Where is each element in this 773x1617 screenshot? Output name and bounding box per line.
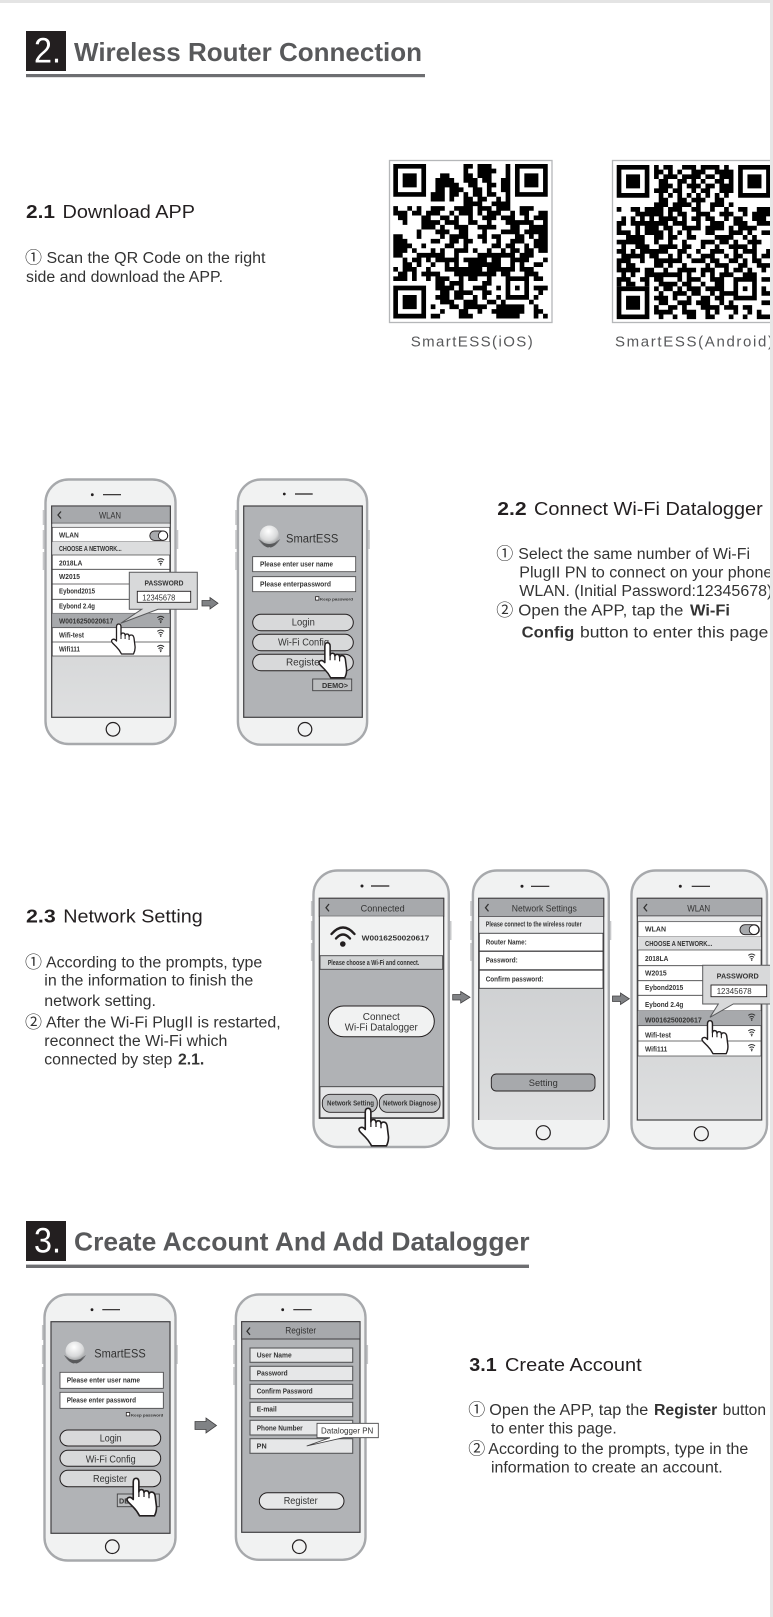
callout: Datalogger PN: Datalogger PN bbox=[321, 1426, 373, 1436]
phone: Connected screen: Network Setting bbox=[327, 1101, 374, 1108]
phone: Register form: User Name bbox=[257, 1353, 292, 1360]
phone: SmartESS login with Wi-Fi Config tap: Register bbox=[286, 658, 324, 668]
callout: password: PASSWORD bbox=[144, 580, 184, 587]
phone: SmartESS login with Register tap: Please enter user name bbox=[67, 1378, 140, 1385]
text block: 2.3 Network Setting: ① bbox=[25, 948, 42, 973]
phone: SmartESS login with Wi-Fi Config tap: Please enter user name bbox=[260, 562, 333, 569]
text block: 3.1 Create Account: 3.1 bbox=[469, 1354, 497, 1375]
text block: 3.1 Create Account: Open the APP, tap the bbox=[489, 1402, 648, 1419]
phone: Network Settings screen: Please connect to the wireless router bbox=[486, 922, 582, 929]
phone: WLAN list with password popup (second): 2018LA bbox=[645, 956, 668, 963]
phone: WLAN list with password popup: Eybond2015 bbox=[59, 589, 95, 596]
heading: section 2: 2. bbox=[34, 32, 61, 70]
phone: WLAN list with password popup: WLAN bbox=[59, 533, 79, 540]
text block: 2.2 Connect Wi-Fi Datalogger: Open the APP, tap the bbox=[518, 603, 683, 620]
phone: WLAN list with password popup: CHOOSE A NETWORK... bbox=[59, 546, 122, 553]
text block: 2.2 Connect Wi-Fi Datalogger: PlugII PN to connect on your phone bbox=[519, 565, 772, 582]
phone: Register form: Confirm Password bbox=[257, 1389, 313, 1396]
text block: 2.1 Download APP: Scan the QR Code on the right bbox=[46, 250, 266, 267]
phone: Connected screen: Wi-Fi Datalogger bbox=[345, 1022, 418, 1034]
arrow bbox=[195, 1418, 216, 1433]
phone: WLAN list with password popup: W2015 bbox=[59, 574, 80, 581]
phone: SmartESS login with Register tap: Please enter password bbox=[67, 1398, 136, 1405]
phone: Connected screen: Network Diagnose bbox=[383, 1101, 437, 1108]
phone: Network Settings screen bbox=[471, 870, 610, 1148]
phone: Register form: Password bbox=[257, 1371, 288, 1378]
text block: 2.3 Network Setting: According to the prompts, type bbox=[46, 954, 262, 971]
phone: Register form: Phone Number bbox=[257, 1426, 303, 1433]
heading: section 2 bbox=[26, 31, 425, 77]
text block: 2.3 Network Setting: ② bbox=[25, 1008, 42, 1033]
text block: 2.2 Connect Wi-Fi Datalogger: ② bbox=[496, 596, 513, 621]
QR code: SmartESS iOS: SmartESS(iOS) bbox=[411, 334, 533, 351]
phone: SmartESS login with Register tap: Login bbox=[100, 1433, 122, 1444]
heading: section 2: Wireless Router Connection bbox=[74, 37, 422, 67]
icon: hand pointer bbox=[319, 643, 347, 678]
phone: Network Settings screen: Password: bbox=[486, 958, 518, 965]
text block: 2.2 Connect Wi-Fi Datalogger: Select the same number of Wi-Fi bbox=[518, 546, 750, 563]
phone: Connected screen: Connect bbox=[363, 1012, 400, 1023]
phone: Network Settings screen: Router Name: bbox=[486, 940, 527, 947]
icon: hand pointer bbox=[127, 1478, 156, 1516]
arrow bbox=[202, 598, 218, 609]
phone: Register form: Register bbox=[285, 1325, 316, 1335]
callout: password bbox=[121, 572, 197, 623]
phone: WLAN list with password popup (second) bbox=[632, 870, 773, 1148]
icon: hand pointer bbox=[112, 624, 135, 654]
text block: 3.1 Create Account: to enter this page. bbox=[491, 1421, 617, 1438]
phone: SmartESS login with Register tap bbox=[43, 1294, 177, 1560]
heading: section 3 bbox=[26, 1221, 530, 1268]
text block: 2.3 Network Setting: reconnect the Wi-Fi which bbox=[44, 1033, 227, 1050]
text block: 3.1 Create Account: Create Account bbox=[505, 1354, 642, 1375]
text block: 3.1 Create Account: Register bbox=[654, 1402, 717, 1419]
phone: WLAN list with password popup: 2018LA bbox=[59, 561, 82, 568]
text block: 2.3 Network Setting: 2.3 bbox=[26, 905, 56, 926]
QR code: SmartESS Android: SmartESS(Android) bbox=[615, 334, 773, 351]
phone: Register form: E-mail bbox=[257, 1407, 277, 1414]
phone: SmartESS login with Wi-Fi Config tap: DEMO> bbox=[322, 683, 348, 690]
phone: SmartESS login with Register tap: Wi-Fi Config bbox=[86, 1454, 136, 1465]
text block: 2.2 Connect Wi-Fi Datalogger: WLAN. (Initial Password:12345678) bbox=[519, 583, 772, 600]
phone: Connected screen bbox=[312, 870, 451, 1147]
callout: password: 12345678 bbox=[717, 986, 752, 996]
phone: Connected screen: Please choose a Wi-Fi and connect. bbox=[328, 960, 419, 967]
phone: Network Settings screen: Setting bbox=[529, 1078, 558, 1088]
heading: section 3: Create Account And Add Datalogger bbox=[74, 1227, 530, 1257]
phone: WLAN list with password popup (second): Eybond 2.4g bbox=[645, 1002, 683, 1009]
phone: Connected screen: W0016250020617 bbox=[362, 936, 429, 943]
text block: 2.2 Connect Wi-Fi Datalogger: ① bbox=[496, 540, 513, 564]
phone: WLAN list with password popup (second): Eybond2015 bbox=[645, 985, 683, 992]
icon: hand pointer bbox=[359, 1108, 388, 1146]
phone: Network Settings screen: Network Settings bbox=[512, 904, 577, 914]
phone: Connected screen: Connected bbox=[361, 904, 405, 914]
QR code: SmartESS iOS bbox=[390, 160, 552, 351]
QR code: SmartESS Android bbox=[612, 160, 773, 351]
phone: WLAN list with password popup (second): Wifi-test bbox=[645, 1033, 672, 1040]
phone: SmartESS login with Register tap: DEMO> bbox=[119, 1498, 145, 1506]
phone: WLAN list with password popup (second): CHOOSE A NETWORK... bbox=[645, 941, 712, 948]
text block: 2.1 Download APP bbox=[25, 201, 266, 286]
phone: WLAN list with password popup (second): WLAN bbox=[645, 927, 666, 934]
text block: 3.1 Create Account: button bbox=[723, 1402, 766, 1419]
text block: 3.1 Create Account: information to create an account. bbox=[491, 1460, 723, 1477]
phone: SmartESS login with Wi-Fi Config tap: Keep password bbox=[320, 596, 354, 602]
phone: SmartESS login with Wi-Fi Config tap: Login bbox=[292, 618, 315, 628]
text block: 2.2 Connect Wi-Fi Datalogger: Wi-Fi bbox=[690, 603, 730, 620]
text block: 2.3 Network Setting bbox=[25, 905, 281, 1068]
phone: WLAN list with password popup (second): Wifi111 bbox=[645, 1047, 667, 1054]
text block: 2.3 Network Setting: Network Setting bbox=[63, 905, 203, 926]
callout: Datalogger PN bbox=[307, 1423, 378, 1446]
text block: 2.2 Connect Wi-Fi Datalogger: button to enter this page bbox=[580, 625, 768, 642]
icon: Wi-Fi bbox=[332, 928, 354, 946]
text block: 2.3 Network Setting: in the information to finish the bbox=[44, 973, 253, 990]
phone: WLAN list with password popup: Wifi111 bbox=[59, 647, 80, 654]
callout: password bbox=[703, 965, 773, 1017]
phone: SmartESS login with Register tap: Keep password bbox=[131, 1412, 164, 1417]
text block: 2.3 Network Setting: 2.1. bbox=[178, 1051, 204, 1068]
phone: SmartESS login with Register tap: SmartESS bbox=[94, 1348, 146, 1360]
arrow bbox=[453, 992, 470, 1003]
text block: 2.2 Connect Wi-Fi Datalogger: Config bbox=[522, 625, 574, 642]
phone: WLAN list with password popup: W0016250020617 bbox=[59, 618, 113, 625]
heading: section 3: 3. bbox=[34, 1222, 61, 1260]
phone: Register form: PN bbox=[257, 1444, 267, 1451]
phone: WLAN list with password popup (second): W2015 bbox=[645, 971, 667, 978]
text block: 3.1 Create Account: According to the prompts, type in the bbox=[488, 1441, 748, 1458]
phone: Network Settings screen: Confirm password: bbox=[486, 977, 544, 984]
text block: 3.1 Create Account: ① bbox=[468, 1396, 485, 1420]
text block: 2.1 Download APP: 2.1 bbox=[26, 201, 55, 222]
text block: 3.1 Create Account bbox=[468, 1354, 766, 1477]
phone: WLAN list with password popup: Eybond 2.4g bbox=[59, 604, 95, 611]
text block: 2.2 Connect Wi-Fi Datalogger: 2.2 bbox=[497, 498, 527, 519]
text block: 2.3 Network Setting: After the Wi-Fi PlugII is restarted, bbox=[46, 1014, 281, 1031]
phone: WLAN list with password popup (second): WLAN bbox=[687, 904, 710, 914]
text block: 2.3 Network Setting: network setting. bbox=[44, 993, 156, 1010]
phone: SmartESS login with Wi-Fi Config tap: Wi-Fi Config bbox=[278, 638, 329, 648]
text block: 2.2 Connect Wi-Fi Datalogger: Connect Wi-Fi Datalogger bbox=[534, 498, 763, 519]
text block: 2.1 Download APP: Download APP bbox=[62, 201, 195, 222]
icon: hand pointer bbox=[702, 1021, 728, 1054]
text block: 2.2 Connect Wi-Fi Datalogger bbox=[496, 498, 772, 642]
phone: WLAN list with password popup: Wifi-test bbox=[59, 633, 85, 640]
phone: SmartESS login with Wi-Fi Config tap: SmartESS bbox=[286, 533, 339, 545]
phone: SmartESS login with Wi-Fi Config tap: Please enterpassword bbox=[260, 582, 331, 589]
text block: 2.1 Download APP: side and download the APP. bbox=[26, 269, 223, 286]
callout: password: PASSWORD bbox=[717, 974, 759, 981]
phone: WLAN list with password popup (second): W0016250020617 bbox=[645, 1018, 702, 1025]
phone: Register form: Register bbox=[284, 1496, 318, 1507]
callout: password: 12345678 bbox=[142, 593, 176, 603]
phone: WLAN list with password popup: WLAN bbox=[99, 511, 121, 521]
phone: Register form bbox=[234, 1294, 378, 1560]
text block: 2.3 Network Setting: connected by step bbox=[44, 1051, 172, 1068]
phone: WLAN list with password popup bbox=[44, 480, 197, 744]
arrow bbox=[612, 993, 629, 1004]
phone: SmartESS login with Wi-Fi Config tap bbox=[236, 480, 369, 745]
phone: SmartESS login with Register tap: Register bbox=[93, 1474, 128, 1485]
text block: 2.1 Download APP: ① bbox=[25, 244, 42, 268]
text block: 3.1 Create Account: ② bbox=[468, 1434, 485, 1460]
